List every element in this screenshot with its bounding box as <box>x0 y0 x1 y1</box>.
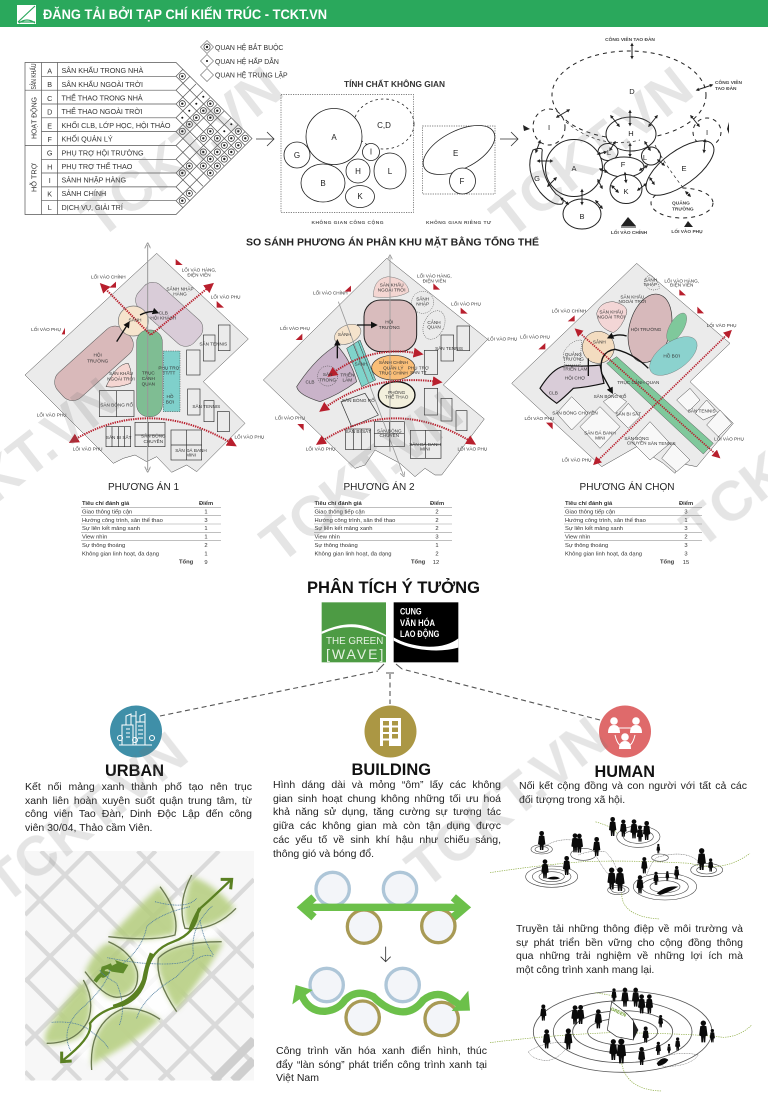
evaluation table: option 2: Tiêu chí đánh giá <box>314 501 363 507</box>
selected option site plan: MINI <box>595 435 605 440</box>
arrow: bubbles to combined diagram <box>500 132 518 146</box>
evaluation table: option 2: 1 <box>435 543 439 549</box>
evaluation table: option 1: Hướng công trình, sân thể thao <box>82 517 163 524</box>
evaluation table: option 1: 1 <box>204 526 208 532</box>
header banner <box>0 0 768 27</box>
selected option site plan: NGOÀI TRỜI <box>597 313 625 319</box>
option 2 site plan: PHỤ TRỢ <box>408 365 429 370</box>
relationship matrix table: PHỤ TRỢ THỂ THAO <box>62 162 133 171</box>
human green message diagram <box>490 988 752 1091</box>
option 2 site plan: TRONG <box>319 377 336 382</box>
text block: urban: viên 30/04, Thảo cầm Viên. <box>25 822 152 834</box>
relationship matrix table: E <box>47 122 52 130</box>
text block: building conclusion: Việt Nam <box>276 1072 319 1084</box>
option 2 site plan: SÂN TT <box>410 369 427 375</box>
evaluation table: option 2: 3 <box>435 534 439 540</box>
dashed connectors to pillars <box>160 664 600 720</box>
evaluation table: option 1: 3 <box>204 518 208 524</box>
option 1 site plan: LỐI VÀO PHỤ <box>31 326 61 332</box>
option 1 site plan: TRƯỜNG <box>87 358 109 364</box>
evaluation table: option 2: Sự thông thoáng <box>314 543 358 549</box>
evaluation table: option 2: 12 <box>433 560 439 566</box>
evaluation table: option 2: Giao thông tiếp cận <box>314 510 365 516</box>
evaluation table: option 1: 1 <box>204 510 208 516</box>
public space bubble diagram: L <box>388 167 393 176</box>
evaluation table: selected option: 15 <box>683 560 689 566</box>
evaluation table: option 1: 1 <box>204 552 208 558</box>
evaluation table: option 1: Tiêu chí đánh giá <box>82 501 130 507</box>
icon: urban <box>110 706 162 758</box>
pillar title: urban: URBAN <box>105 761 164 780</box>
option 1 site plan: SÂN ĐÁ BANH <box>175 447 207 453</box>
combined bubble relationship diagram: TAO ĐÀN <box>715 85 737 92</box>
option 1 site plan: CLB <box>159 310 168 315</box>
selected option site plan: SÂN BÓNG RỔ <box>594 393 627 399</box>
text block: building: thông gió và bóng đổ. <box>273 848 374 860</box>
combined bubble relationship diagram: B <box>579 212 585 221</box>
public space bubble diagram: G <box>294 151 300 160</box>
selected option site plan <box>512 263 744 473</box>
selected option site plan: SÂN BI SẮT <box>616 410 641 417</box>
logo: the green wave <box>322 602 386 662</box>
option 2 site plan: THỂ THAO <box>385 394 409 400</box>
relationship matrix table: SẢNH CHÍNH <box>62 189 106 198</box>
relationship matrix table: D <box>47 108 52 116</box>
watermarks: TCKT.VN <box>249 379 474 574</box>
relationship matrix table: KHỐI QUẢN LÝ <box>62 134 113 144</box>
option 1 site plan: PHỤ TRỢ <box>158 365 180 370</box>
combined bubble relationship diagram: QUẢNG <box>672 200 690 206</box>
option 2 site plan: SẢNH <box>416 296 429 302</box>
evaluation table: option 1: Giao thông tiếp cận <box>82 510 132 516</box>
public space bubble diagram: I <box>370 148 372 156</box>
option 2 site plan: QUAN <box>427 325 441 330</box>
text block: building: giữa các không gian mà còn tận dụng được <box>273 820 501 832</box>
header title: ĐĂNG TẢI BỞI TẠP CHÍ KIẾN TRÚC - TCKT.VN <box>43 7 327 22</box>
option 1 site plan: HỒ <box>167 393 174 399</box>
combined bubble relationship diagram: I <box>706 128 708 137</box>
evaluation table: selected option: 3 <box>684 510 688 516</box>
combined bubble relationship diagram: L <box>643 153 647 162</box>
option 2 site plan: TRỤC CHÍNH <box>379 370 408 376</box>
option 2 site plan: SÂN BÓNG <box>377 427 402 433</box>
selected option site plan: LỐI VÀO PHỤ <box>524 415 554 421</box>
option 1 site plan: SÂN BI SẮT <box>106 433 132 440</box>
private space bubble diagram: F <box>460 177 465 186</box>
matrix legend: QUAN HỆ BẮT BUỘC <box>215 43 283 52</box>
relationship matrix table: H <box>47 162 52 172</box>
option 1 site plan: HÀNG <box>173 290 187 296</box>
option 2 site plan: SÂN KHẤU <box>380 282 404 288</box>
option 1 site plan: LỐI VÀO PHỤ <box>73 445 103 451</box>
option 1 site plan: LỐI VÀO PHỤ <box>37 412 67 418</box>
option 2 site plan <box>263 257 517 477</box>
evaluation table: selected option: Điểm <box>679 500 693 507</box>
option 1 site plan: ĐIỆN VIÊN <box>187 270 211 277</box>
text block: building <box>273 779 501 860</box>
option 1 site plan: QUAN <box>142 381 155 386</box>
selected option site plan: SÂN ĐÁ BANH <box>584 429 616 435</box>
option 2 site plan: SÂN TENNIS <box>435 345 463 351</box>
relationship matrix table: B <box>47 80 52 89</box>
option 1 site plan: LỐI VÀO HÀNG, <box>182 267 216 273</box>
combined bubble relationship diagram: D <box>629 87 635 96</box>
arrow: matrix to bubbles <box>256 132 274 146</box>
relationship matrix table: THỂ THAO NGOÀI TRỜI <box>62 107 142 116</box>
option 2 site plan: LỐI VÀO PHỤ <box>280 325 310 331</box>
matrix legend <box>200 40 288 82</box>
relationship matrix table: K <box>47 190 52 198</box>
watermarks: TCKT.VN <box>69 54 294 249</box>
public space bubble diagram: C,D <box>377 121 391 130</box>
text block: human message <box>516 923 743 976</box>
selected option site plan: HỘI TRƯỜNG <box>631 326 662 332</box>
option 2 site plan: LỐI VÀO PHỤ <box>487 336 517 342</box>
option titles: PHƯƠNG ÁN 2 <box>343 480 415 493</box>
combined bubble relationship diagram: LỐI VÀO PHỤ <box>671 228 703 235</box>
relationship matrix table: THỂ THAO TRONG NHÀ <box>62 94 143 102</box>
evaluation table: selected option: 3 <box>684 543 688 549</box>
combined bubble relationship diagram: CÔNG VIÊN TAO ĐÀN <box>605 35 655 43</box>
evaluation table: selected option: Sự liên kết mảng xanh <box>565 526 623 532</box>
logo: cung van hoa lao dong: LAO ĐỘNG <box>400 628 439 639</box>
text block: human intro: đối tượng trong xã hội. <box>519 794 625 806</box>
selected option site plan: ĐIỆN VIÊN <box>670 281 693 288</box>
selected option site plan: LỐI VÀO CHÍNH <box>552 307 586 313</box>
text block: building: gian sinh hoạt chung không những tối ưu hoá <box>273 793 501 805</box>
matrix legend: QUAN HỆ HẤP DẪN <box>215 56 279 66</box>
selected option site plan: SÂN TENNIS <box>648 440 676 446</box>
relationship matrix table: HỖ TRỢ <box>30 163 38 192</box>
space character heading: TÍNH CHẤT KHÔNG GIAN <box>344 78 445 89</box>
option 2 site plan: LỐI VÀO PHỤ <box>451 301 481 307</box>
combined bubble relationship diagram: LỐI VÀO CHÍNH <box>611 228 648 236</box>
relationship matrix table: F <box>48 135 53 144</box>
option 1 site plan: HỘI <box>94 352 102 358</box>
public space bubble diagram: A <box>331 133 337 142</box>
selected option site plan: SÂN KHẤU <box>620 294 644 300</box>
relationship matrix table: SÂN KHẤU NGOÀI TRỜI <box>62 79 143 89</box>
option 2 site plan: SÂN BI SẮT <box>346 427 371 434</box>
text block: human message: sự phát triển bền vững cho cộng đồng thông <box>516 937 743 949</box>
evaluation table: option 1: 1 <box>204 534 208 540</box>
relationship matrix table: KHỐI CLB, LỚP HỌC, HỘI THẢO <box>62 120 171 130</box>
option 2 site plan: CLB <box>305 379 315 384</box>
evaluation table: option 1: Sự thông thoáng <box>82 543 125 549</box>
evaluation table: option 2: Sự liên kết mảng xanh <box>314 526 373 532</box>
evaluation table: option 2: 2 <box>435 510 439 516</box>
option 2 site plan: MINI <box>420 447 430 452</box>
option 2 site plan: QUẢN LÝ <box>383 364 404 370</box>
selected option site plan: NHẬP <box>644 281 657 287</box>
option 2 site plan: LỐI VÀO PHỤ <box>306 445 336 451</box>
option 2 site plan: LỐI VÀO CHÍNH <box>313 290 348 296</box>
combined bubble relationship diagram: G <box>534 174 540 183</box>
option 2 site plan: SÂN BÓNG RỔ <box>342 397 375 403</box>
logo: the green wave: [WAVE] <box>326 646 383 662</box>
selected option site plan: TRƯỜNG <box>563 356 584 362</box>
evaluation table: option 1: 9 <box>204 560 208 566</box>
option 2 site plan: HỘI <box>385 319 393 325</box>
combined bubble relationship diagram: L <box>607 148 611 157</box>
option 1 site plan: LỐI VÀO PHỤ <box>211 294 241 300</box>
option 1 site plan: TRỤC <box>142 371 155 376</box>
option 1 site plan: MINI <box>186 453 196 458</box>
combined bubble relationship diagram: H <box>628 129 634 138</box>
option titles <box>108 480 674 493</box>
option 1 site plan: SÂN BÓNG RỔ <box>100 401 133 407</box>
option 1 site plan: SẢNH NHẬP <box>166 286 194 292</box>
watermarks: TCKT.VN <box>394 704 619 899</box>
option 2 site plan: NGOÀI TRỜI <box>378 286 406 292</box>
evaluation table: selected option: Tổng <box>660 558 675 566</box>
option 1 site plan: SÂN TENNIS <box>192 403 220 409</box>
icon: building <box>364 706 416 758</box>
text block: urban: xanh liên hoàn xuyên suốt quận trung tâm, từ <box>25 795 252 807</box>
option 1 site plan: SẢNH <box>129 317 141 323</box>
private space bubble diagram <box>416 115 502 226</box>
text block: human intro: Nối kết cộng đồng và con người với tất cả các <box>519 780 747 792</box>
option 2 site plan: TRIỂN <box>340 372 354 378</box>
human green message diagram: GREEN <box>610 1006 628 1018</box>
evaluation table: selected option: Tiêu chí đánh giá <box>565 501 613 507</box>
option titles: PHƯƠNG ÁN 1 <box>108 480 179 493</box>
evaluation table: option 1: Điểm <box>199 500 213 507</box>
evaluation table: option 1: Tổng <box>179 558 194 566</box>
watermarks: TCKT.VN <box>479 54 704 249</box>
selected option site plan: NGOÀI TRỜI <box>618 298 646 304</box>
combined bubble relationship diagram <box>523 35 742 236</box>
evaluation table: option 1: Sự liên kết mảng xanh <box>82 526 140 532</box>
logo: cung van hoa lao dong <box>394 602 458 662</box>
evaluation table: option 1: Không gian linh hoạt, đa dạng <box>82 552 159 558</box>
combined bubble relationship diagram: A <box>571 164 577 173</box>
relationship matrix table: HOẠT ĐỘNG <box>30 97 38 139</box>
text block: human message: qua những trải nghiệm về những lợi ích mà <box>516 950 743 962</box>
icon: human <box>599 706 651 758</box>
evaluation table: selected option: 1 <box>684 518 688 524</box>
option 1 site plan: NGOÀI TRỜI <box>107 375 135 381</box>
relationship matrix table <box>25 62 252 214</box>
evaluation table: option 2: Điểm <box>430 500 444 507</box>
option 1 site plan: SÂN TENNIS <box>199 340 227 346</box>
text block: urban <box>25 781 252 834</box>
option 2 site plan: LỐI VÀO PHỤ <box>275 414 305 420</box>
evaluation table: selected option: 3 <box>684 526 688 532</box>
selected option site plan: QUẢNG <box>565 351 582 357</box>
combined bubble relationship diagram: TRƯỜNG <box>672 204 694 212</box>
pillar title: human: HUMAN <box>594 762 655 781</box>
text block: human message: Truyền tải những thông điệp về môi trường và <box>516 923 743 935</box>
icon: TCKT logo <box>17 5 36 24</box>
option 2 site plan: SẢNH <box>355 360 367 366</box>
option 2 site plan: LÃM <box>343 376 352 382</box>
combined bubble relationship diagram: E <box>681 164 687 173</box>
relationship matrix table: A <box>47 66 52 76</box>
public space bubble diagram: B <box>320 179 326 188</box>
relationship matrix table: L <box>48 203 52 212</box>
option 2 site plan: SẢNH <box>338 331 351 337</box>
option 2 site plan: NHẬP <box>416 300 429 306</box>
relationship matrix table: G <box>47 148 53 158</box>
building wave diagram <box>292 872 470 1036</box>
selected option site plan: HỒ BƠI <box>663 353 680 359</box>
selected option site plan: SẢNH <box>644 277 657 283</box>
text block: urban: Kết nối mảng xanh thành phố tạo nên trục <box>25 781 252 793</box>
option 1 site plan: TT/TT <box>163 371 175 376</box>
combined bubble relationship diagram: F <box>621 160 626 169</box>
option 2 site plan: SẢNH CHÍNH <box>379 359 408 365</box>
text block: building: Hình dáng dài và mỏng “ôm” lấy các không <box>273 779 501 791</box>
option 2 site plan: SÂN <box>323 371 332 377</box>
option 2 site plan: CHUYỀN <box>379 432 399 438</box>
relationship matrix table: SẢNH NHẬP HÀNG <box>62 176 126 184</box>
text block: building: các yếu tố về sinh khí hậu như chiếu sáng, <box>273 834 501 846</box>
option 2 site plan: ĐIỆN VIÊN <box>423 276 446 283</box>
option 1 site plan: LỐI VÀO PHỤ <box>234 433 264 439</box>
selected option site plan: LỐI VÀO HÀNG, <box>664 277 699 283</box>
combined bubble relationship diagram: CÔNG VIÊN <box>715 78 742 86</box>
text block: human message: một công trình xanh mang lại. <box>516 964 654 976</box>
option 2 site plan: TRƯỜNG <box>379 324 400 330</box>
private space bubble diagram: E <box>453 149 458 158</box>
selected option site plan: LỐI VÀO PHỤ <box>714 436 744 442</box>
selected option site plan: SÂN BÓNG <box>624 435 649 441</box>
relationship matrix table: PHỤ TRỢ HỘI TRƯỜNG <box>62 148 144 158</box>
public space bubble diagram: H <box>355 167 361 176</box>
evaluation table: option 2: Không gian linh hoạt, đa dạng <box>314 552 392 558</box>
pillar title: building: BUILDING <box>352 760 431 779</box>
selected option site plan: CLB <box>549 390 558 395</box>
evaluation table: option 2: Hướng công trình, sân thể thao <box>314 517 395 524</box>
option 1 site plan: SÂN BÓNG <box>141 433 166 439</box>
option 1 site plan: SÂN KHẤU <box>109 370 133 376</box>
arrow: transformation <box>381 947 391 962</box>
selected option site plan: SÂN TENNIS <box>688 407 716 413</box>
selected option site plan: TRỤC CẢNH QUAN <box>617 379 659 385</box>
relationship matrix table: I <box>49 176 51 185</box>
selected option site plan: SÂN KHẤU <box>599 309 623 315</box>
text block: building conclusion <box>276 1045 487 1084</box>
text block: human intro <box>519 780 747 806</box>
section heading: compare zoning options: SO SÁNH PHƯƠNG ÁN PHÂN KHU MẶT BẰNG TỔNG THỂ <box>246 236 539 248</box>
option 1 site plan: LỐI VÀO CHÍNH <box>91 273 126 279</box>
option 1 site plan: CHUYỀN <box>143 438 163 444</box>
selected option site plan: SẢNH <box>593 339 606 345</box>
evaluation table: option 2: 2 <box>435 518 439 524</box>
selected option site plan: LỐI VÀO PHỤ <box>562 456 592 462</box>
evaluation table: selected option: 2 <box>684 534 688 540</box>
evaluation table: option 1: 2 <box>204 543 208 549</box>
evaluation table: selected option: View nhìn <box>565 534 590 540</box>
logo: cung van hoa lao dong: CUNG <box>400 607 422 617</box>
urban green network map <box>25 851 254 1081</box>
evaluation table: option 2: View nhìn <box>314 534 340 540</box>
evaluation table: selected option: Sự thông thoáng <box>565 543 608 549</box>
evaluation table: option 2: 2 <box>435 552 439 558</box>
option titles: PHƯƠNG ÁN CHỌN <box>580 480 674 493</box>
evaluation table: selected option: Giao thông tiếp cận <box>565 510 615 516</box>
option 2 site plan: CẢNH <box>427 319 441 325</box>
public space bubble diagram: KHÔNG GIAN CÔNG CỘNG <box>312 218 384 226</box>
option 1 site plan <box>25 245 264 472</box>
text block: building conclusion: Công trình văn hóa xanh điển hình, thúc <box>276 1045 487 1057</box>
combined bubble relationship diagram: K <box>623 187 629 196</box>
logo: cung van hoa lao dong: VĂN HÓA <box>400 617 435 628</box>
option 1 site plan: BƠI <box>166 399 174 404</box>
text block: urban: công viên Tao Đàn, Dinh Độc Lập đến công <box>25 808 252 820</box>
text block: building: khả năng sử dụng, tăng cường sự tương tác <box>273 806 501 818</box>
relationship matrix table: C <box>47 94 52 103</box>
evaluation table: selected option <box>564 500 702 566</box>
logo: the green wave: THE GREEN <box>326 636 383 647</box>
evaluation table: selected option: Hướng công trình, sân thể thao <box>565 517 646 524</box>
section heading: concept analysis: PHÂN TÍCH Ý TƯỞNG <box>307 578 480 597</box>
human community diagram <box>490 817 750 919</box>
option 2 site plan: LỐI VÀO HÀNG, <box>417 273 452 279</box>
option 2 site plan: PHÒNG <box>388 389 406 395</box>
evaluation table: selected option: Không gian linh hoạt, đa dạng <box>565 552 642 558</box>
evaluation table: option 1: View nhìn <box>82 534 107 540</box>
relationship matrix table: SÂN KHẤU TRONG NHÀ <box>62 65 143 75</box>
public space bubble diagram <box>281 94 414 226</box>
evaluation table: selected option: 3 <box>684 552 688 558</box>
relationship matrix table: DỊCH VỤ, GIẢI TRÍ <box>62 203 123 212</box>
evaluation table: option 2: 2 <box>435 526 439 532</box>
selected option site plan: SÂN BÓNG CHUYỀN <box>552 409 598 415</box>
matrix legend: QUAN HỆ TRUNG LẬP <box>215 70 288 80</box>
selected option site plan: LỐI VÀO PHỤ <box>520 334 550 340</box>
selected option site plan: TRIỂN LÃM <box>563 366 588 372</box>
option 1 site plan: CẢNH <box>142 375 155 381</box>
evaluation table: option 1 <box>81 500 221 566</box>
public space bubble diagram: K <box>357 192 363 201</box>
combined bubble relationship diagram: I <box>548 123 550 132</box>
option 2 site plan: SÂN ĐÁ BANH <box>409 441 441 447</box>
relationship matrix table: SÂN KHẤU <box>28 64 38 90</box>
option 2 site plan: LỐI VÀO PHỤ <box>457 445 487 451</box>
text block: building conclusion: đẩy “làn sóng” phát triển công trình xanh tại <box>276 1059 487 1071</box>
evaluation table: option 2: Tổng <box>411 558 426 566</box>
private space bubble diagram: KHÔNG GIAN RIÊNG TƯ <box>426 218 492 226</box>
selected option site plan: CHUYỀN <box>627 440 647 446</box>
selected option site plan: HỘI CHỢ <box>565 374 585 380</box>
selected option site plan: LỐI VÀO PHỤ <box>707 322 737 328</box>
evaluation table: option 2 <box>314 500 452 566</box>
option 1 site plan: HỘI KHÁCH <box>150 315 176 321</box>
